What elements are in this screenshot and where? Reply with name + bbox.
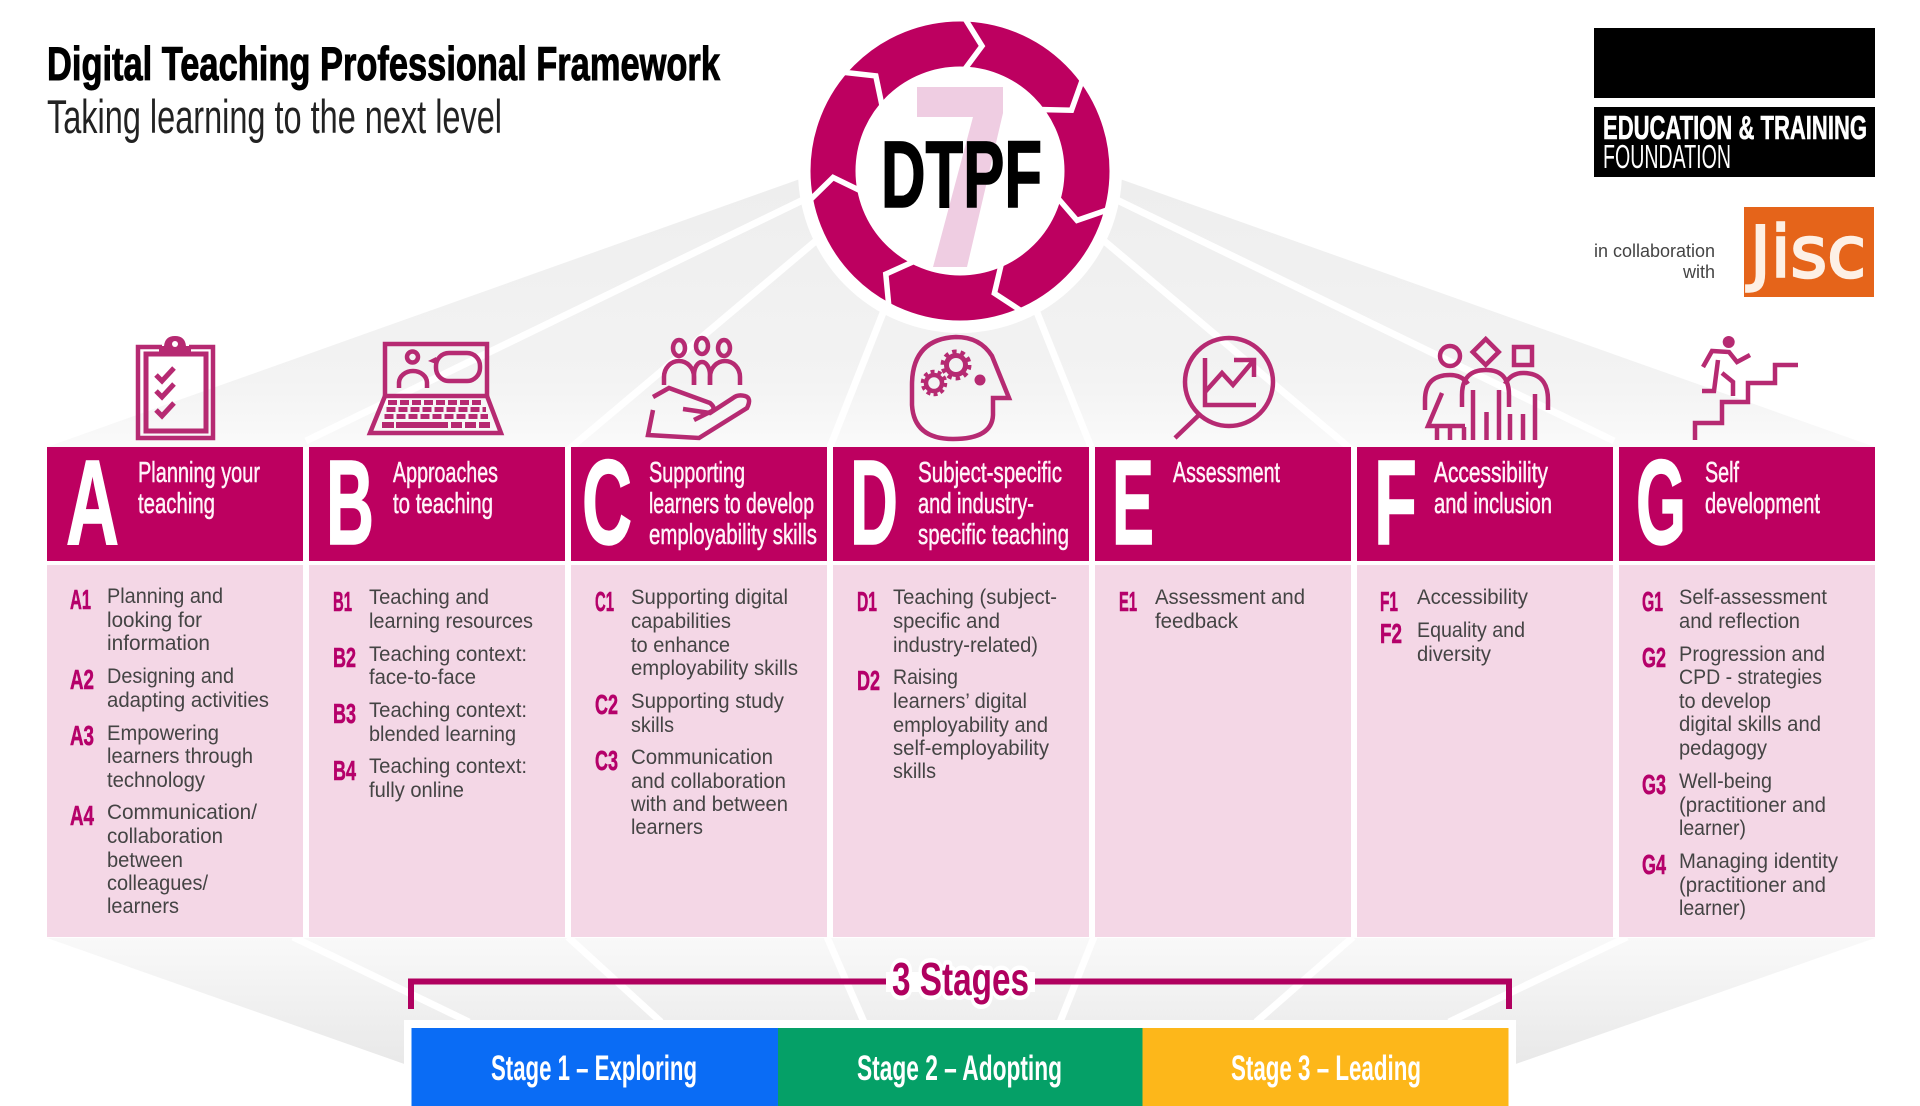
column D header: D <box>850 434 898 570</box>
column C body: and collaboration <box>631 770 786 793</box>
column F body: F1 <box>1380 586 1398 617</box>
panel: C Supporting learners <box>571 434 827 937</box>
logo: Jisc collaboration <box>1594 207 1874 297</box>
column A body: learners through <box>107 745 253 768</box>
icon: magnifier with chart <box>1175 338 1273 438</box>
column A body: Planning and <box>107 585 223 608</box>
column D body: self-employability <box>893 737 1049 760</box>
column B body <box>309 565 565 937</box>
central DTPF emblem <box>798 9 1122 333</box>
column C body: Supporting study <box>631 690 784 713</box>
icon: clipboard <box>138 336 213 438</box>
column A body: A2 <box>70 664 94 695</box>
column G body: (practitioner and <box>1679 874 1826 897</box>
stage 2: Stage 2 – Adopting <box>857 1049 1062 1088</box>
column C body: employability skills <box>631 657 798 680</box>
column F header: F <box>1374 434 1417 570</box>
column F body <box>1357 565 1613 937</box>
column B header: B <box>326 434 374 570</box>
column D body: employability and <box>893 714 1048 737</box>
column G body: CPD - strategies <box>1679 666 1822 689</box>
logo: Education and Training Foundation: FOUNDATION <box>1603 138 1731 175</box>
emblem label: DTPF <box>881 122 1042 228</box>
stage 2 <box>778 1028 1142 1106</box>
column G header: development <box>1705 488 1820 520</box>
column D body: D1 <box>857 586 877 617</box>
column D header: specific teaching <box>918 519 1069 551</box>
logo: Jisc collaboration: with <box>1682 261 1715 282</box>
logo: Jisc collaboration: in collaboration <box>1594 240 1715 261</box>
column A body: learners <box>107 895 179 918</box>
column A body: collaboration <box>107 825 223 848</box>
column D body: skills <box>893 760 936 783</box>
column G header <box>1619 434 1875 570</box>
column G body: Well-being <box>1679 770 1772 793</box>
stage 1: Stage 1 – Exploring <box>491 1049 697 1088</box>
column B body: fully online <box>369 779 464 802</box>
stage 3: Stage 3 – Leading <box>1231 1049 1421 1088</box>
column G body: learner) <box>1679 897 1746 920</box>
column D body: Teaching (subject- <box>893 586 1057 609</box>
panel: B Approaches to teaching <box>309 434 565 937</box>
column A header: Planning your <box>138 457 260 489</box>
column D body: D2 <box>857 665 880 696</box>
column E body <box>1095 565 1351 937</box>
column D header: Subject-specific <box>918 457 1062 489</box>
column F body: Accessibility <box>1417 586 1528 609</box>
3 Stages bracket and heading <box>411 953 1509 1009</box>
icon: laptop with speech bubble <box>370 344 501 433</box>
column F body: Equality and <box>1417 619 1525 642</box>
panel: E Assessment <box>1095 434 1351 937</box>
panel: D Subject-specific teaching <box>833 434 1089 937</box>
column A body: A4 <box>70 800 94 831</box>
heading: Digital Teaching Professional Framework <box>47 37 721 90</box>
column G body: G4 <box>1642 849 1666 880</box>
icon: people in a hand <box>648 338 749 438</box>
stages bar <box>404 1020 1516 1106</box>
column G body: to develop <box>1679 690 1771 713</box>
column D header <box>833 434 1089 570</box>
column D body: industry-related) <box>893 634 1038 657</box>
column C body <box>571 565 827 937</box>
column G body: and reflection <box>1679 610 1800 633</box>
column B header <box>309 434 565 570</box>
column A body <box>47 565 303 937</box>
column G body: (practitioner and <box>1679 794 1826 817</box>
column F body: diversity <box>1417 643 1491 666</box>
column A body: adapting activities <box>107 689 269 712</box>
column B body: B3 <box>333 698 356 729</box>
column E header: Assessment <box>1173 457 1280 489</box>
column B body: learning resources <box>369 610 533 633</box>
column A header: teaching <box>138 488 215 520</box>
column A body: between <box>107 849 183 872</box>
3 Stages bracket and heading: 3 Stages <box>892 953 1029 1005</box>
stage 3 <box>1142 1028 1508 1106</box>
background fan: grey pyramid shapes with white rays <box>47 179 1875 1066</box>
column A body: Empowering <box>107 722 219 745</box>
panel: A Planning your teaching <box>47 434 303 937</box>
column C body: C1 <box>595 586 614 617</box>
icon: diverse group of people <box>1425 339 1548 440</box>
column G body: Managing identity <box>1679 850 1838 873</box>
column C header <box>571 434 827 570</box>
column G body: digital skills and <box>1679 713 1821 736</box>
column C header: employability skills <box>649 519 817 551</box>
column C body: to enhance <box>631 634 730 657</box>
column D body: specific and <box>893 610 1000 633</box>
title block <box>47 37 721 143</box>
column A body: A1 <box>70 584 91 615</box>
column E header: E <box>1112 434 1154 570</box>
column C body: C3 <box>595 745 618 776</box>
column B header: to teaching <box>393 488 493 520</box>
column E body: feedback <box>1155 610 1238 633</box>
column C body: Communication <box>631 746 773 769</box>
column B header: Approaches <box>393 457 498 489</box>
column C body: capabilities <box>631 610 731 633</box>
column F header: and inclusion <box>1434 488 1552 520</box>
column A body: Communication/ <box>107 801 257 824</box>
column C body: C2 <box>595 689 618 720</box>
column E header <box>1095 434 1351 570</box>
column C body: Supporting digital <box>631 586 788 609</box>
column C header: C <box>582 434 632 570</box>
column G body: Progression and <box>1679 643 1825 666</box>
column E body: Assessment and <box>1155 586 1305 609</box>
column A body: A3 <box>70 720 94 751</box>
column G body: G1 <box>1642 586 1663 617</box>
column B body: Teaching context: <box>369 643 527 666</box>
column D header: and industry- <box>918 488 1034 520</box>
column D body: Raising <box>893 666 958 689</box>
column B body: Teaching context: <box>369 699 527 722</box>
logo: Jisc collaboration: Jisc <box>1746 211 1866 294</box>
column A body: looking for <box>107 609 202 632</box>
column A body: information <box>107 632 210 655</box>
column G body: learner) <box>1679 817 1746 840</box>
column G header: G <box>1636 434 1686 570</box>
column C body: skills <box>631 714 674 737</box>
column G body: G2 <box>1642 642 1666 673</box>
column C body: with and between <box>630 793 788 816</box>
column G body: G3 <box>1642 769 1666 800</box>
column F body: F2 <box>1380 618 1402 649</box>
column F header <box>1357 434 1613 570</box>
column A body: Designing and <box>107 665 234 688</box>
column B body: face-to-face <box>369 666 476 689</box>
column D body <box>833 565 1089 937</box>
column G body <box>1619 565 1875 937</box>
column B body: Teaching and <box>369 586 489 609</box>
column C header: learners to develop <box>649 488 814 520</box>
column D body: learners’ digital <box>893 690 1027 713</box>
column G body: Self-assessment <box>1679 586 1827 609</box>
column A body: technology <box>107 769 205 792</box>
column G body: pedagogy <box>1679 737 1767 760</box>
column F header: Accessibility <box>1434 457 1548 489</box>
icon: person climbing stairs <box>1695 336 1798 440</box>
logo: Education and Training Foundation <box>1594 28 1875 177</box>
subtitle: Taking learning to the next level <box>47 90 502 143</box>
column B body: B1 <box>333 586 352 617</box>
icon: head with gears <box>912 337 1009 439</box>
column B body: B4 <box>333 755 356 786</box>
panel: F Accessibility and inclusion <box>1357 434 1613 937</box>
stage 1 <box>412 1028 778 1106</box>
column C body: learners <box>631 816 703 839</box>
column E body: E1 <box>1119 586 1137 617</box>
panel: G Self development <box>1619 434 1875 937</box>
column B body: B2 <box>333 642 356 673</box>
column B body: blended learning <box>369 723 516 746</box>
column B body: Teaching context: <box>369 755 527 778</box>
column G header: Self <box>1705 457 1740 489</box>
column A body: colleagues/ <box>107 872 208 895</box>
column C header: Supporting <box>649 457 745 489</box>
column A header <box>47 434 303 570</box>
column A header: A <box>66 434 119 570</box>
